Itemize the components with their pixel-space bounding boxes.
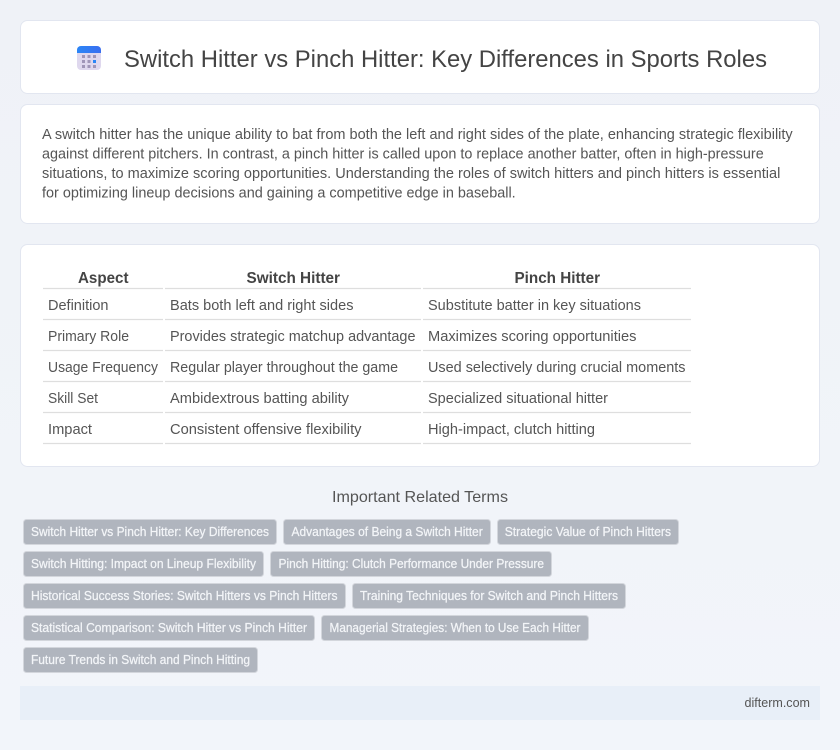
tag	[24, 616, 314, 640]
tag: Strategic Value of Pinch Hitters	[505, 525, 671, 539]
tag	[24, 648, 258, 672]
related term tags	[24, 520, 678, 672]
tag: Switch Hitter vs Pinch Hitter: Key Differences	[31, 525, 269, 539]
tag	[24, 552, 264, 576]
row: skill set: Ambidextrous batting ability	[170, 391, 350, 407]
intro paragraph: A switch hitter has the unique ability to bat from both the left and right sides of the plate, enhancing strategic flexibility	[42, 127, 793, 143]
row: skill set	[48, 391, 608, 407]
row: definition: Substitute batter in key situations	[428, 298, 641, 314]
tag: Future Trends in Switch and Pinch Hitting	[31, 653, 250, 667]
row: primary role	[48, 329, 636, 345]
panel: introduction	[20, 104, 820, 224]
row: skill set: Specialized situational hitter	[428, 391, 608, 407]
intro paragraph: situations, to maximize scoring opportunities. Understanding the roles of switch hitters and pinch hitters is essential	[42, 166, 780, 182]
tag: Switch Hitting: Impact on Lineup Flexibility	[31, 557, 257, 571]
row: definition: Bats both left and right sides	[170, 298, 354, 314]
tag	[284, 520, 490, 544]
tag	[352, 584, 626, 608]
tag: Pinch Hitting: Clutch Performance Under Pressure	[278, 557, 544, 571]
row: impact	[48, 422, 595, 438]
panel: comparison table	[20, 244, 820, 466]
table header row: Aspect	[78, 270, 129, 287]
tag	[24, 584, 346, 608]
icon: calendar	[77, 46, 101, 70]
row: impact: High-impact, clutch hitting	[428, 422, 595, 438]
tag: Training Techniques for Switch and Pinch Hitters	[360, 589, 618, 603]
row: usage frequency	[48, 360, 686, 376]
row: skill set: Skill Set	[48, 391, 98, 407]
tag: Managerial Strategies: When to Use Each Hitter	[330, 621, 580, 635]
row: impact: Consistent offensive flexibility	[170, 422, 362, 438]
row: definition: Definition	[48, 298, 108, 314]
footer credit: difterm.com	[744, 695, 810, 710]
heading: important related terms: Important Related Terms	[332, 489, 508, 506]
intro paragraph: for optimizing lineup decisions and gaining a competitive edge in baseball.	[42, 185, 516, 201]
title: Switch Hitter vs Pinch Hitter: Key Differences in Sports Roles	[124, 46, 767, 73]
row: primary role: Provides strategic matchup advantage	[170, 329, 416, 345]
intro paragraph: against different pitchers. In contrast, a pinch hitter is called upon to replace another batter, often in high-pressure	[42, 146, 764, 162]
row: usage frequency: Usage Frequency	[48, 360, 159, 376]
row: usage frequency: Used selectively during crucial moments	[428, 360, 686, 376]
table header row: Pinch Hitter	[514, 270, 600, 287]
tag	[24, 520, 276, 544]
tag: Statistical Comparison: Switch Hitter vs Pinch Hitter	[31, 621, 307, 635]
intro paragraph	[42, 127, 793, 201]
row: definition	[48, 298, 641, 314]
header panel	[20, 20, 820, 94]
tag: Historical Success Stories: Switch Hitters vs Pinch Hitters	[31, 589, 338, 603]
tag	[270, 552, 552, 576]
tag	[322, 616, 588, 640]
row: primary role: Maximizes scoring opportunities	[428, 329, 636, 345]
row: primary role: Primary Role	[48, 329, 129, 345]
row: usage frequency: Regular player throughout the game	[170, 360, 398, 376]
tag: Advantages of Being a Switch Hitter	[292, 525, 483, 539]
footer bar	[20, 686, 820, 720]
tag	[498, 520, 678, 544]
table header row: Switch Hitter	[246, 270, 340, 287]
row: impact: Impact	[48, 422, 92, 438]
table header row	[78, 270, 600, 287]
